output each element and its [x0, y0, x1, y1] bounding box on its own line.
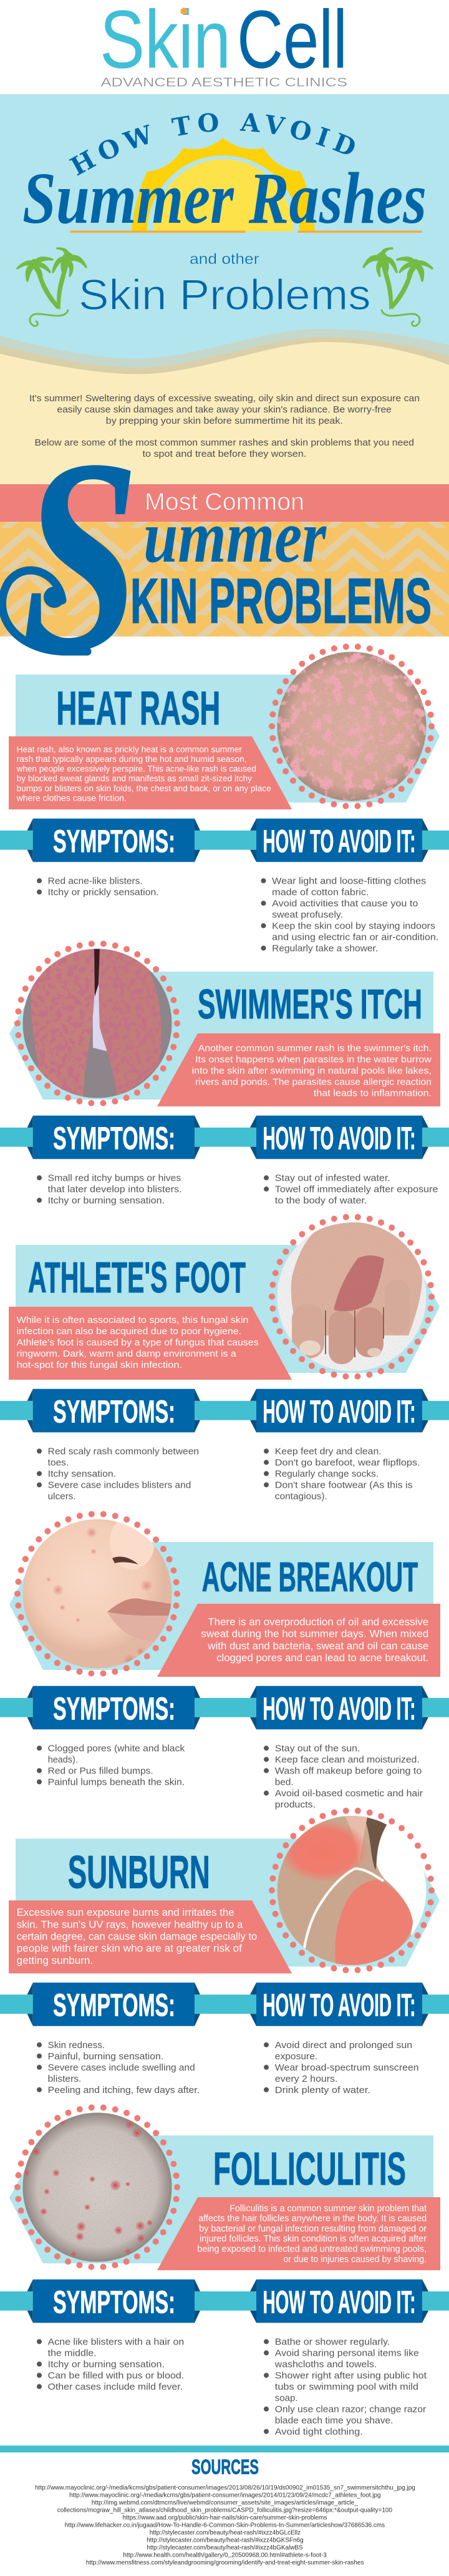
ribbon: symptoms and how to avoid it	[0, 1116, 449, 1159]
symptoms list: Itchy or burning sensation.	[48, 1195, 165, 1206]
ribbon: symptoms and how to avoid it: SYMPTOMS:	[53, 2284, 175, 2320]
intro text	[29, 394, 420, 459]
how to avoid list: Towel off immediately after exposure	[275, 1184, 438, 1194]
title: skin problems: Skin Problems	[79, 271, 371, 319]
ribbon: symptoms and how to avoid it	[0, 1686, 449, 1729]
section: folliculitis	[0, 2107, 449, 2437]
panel background	[9, 972, 433, 1100]
symptoms list: Other cases include mild fever.	[48, 2381, 183, 2392]
description: where clothes cause friction.	[16, 793, 127, 803]
sources list: http://stylecaster.com/beauty/heat-rash/#ixzz4bGLcEllz	[150, 2529, 301, 2536]
how to avoid list	[264, 2040, 419, 2095]
how to avoid list: Only use clean razor; change razor	[275, 2404, 426, 2414]
banner: most common summer skin problems: ummer	[143, 495, 327, 578]
section: heat rash	[0, 646, 449, 954]
symptoms list: Painful, burning sensation.	[48, 2051, 163, 2062]
intro text: It's summer! Sweltering days of excessive sweating, oily skin and direct sun exposure can	[29, 394, 420, 404]
description: ringworm. Dark, warm and damp environment is a	[17, 1349, 236, 1359]
hero sky background	[0, 94, 449, 375]
photo: athlete's foot	[277, 1222, 427, 1372]
section: acne breakout	[0, 1514, 449, 1810]
how to avoid list: Drink plenty of water.	[275, 2085, 370, 2095]
description: with dust and bacteria, sweat and oil can cause	[207, 1641, 428, 1652]
description: Excessive sun exposure burns and irritates the	[17, 1907, 234, 1918]
description: bumps or blisters on skin folds, the chest and back, or on any place	[17, 784, 271, 793]
how to avoid list	[264, 2336, 427, 2437]
how to avoid list: exposure.	[275, 2051, 317, 2062]
symptoms list: Itchy or burning sensation.	[48, 2359, 165, 2369]
section: athlete's foot	[0, 1217, 449, 1501]
description: infection can also be acquired due to poor hygiene.	[17, 1326, 241, 1337]
photo: swimmer's itch	[22, 947, 172, 1100]
how to avoid list: Stay out of infested water.	[275, 1173, 390, 1183]
dotted ring	[272, 1810, 432, 1970]
how to avoid list: Avoid activities that cause you to	[272, 898, 418, 909]
description: by bacterial or fungal infection resulting from damaged or	[199, 2224, 427, 2234]
description: when people excessively perspire. This acne-like rash is caused	[16, 764, 256, 774]
symptoms list	[37, 1446, 199, 1501]
sources list: http://stylecaster.com/beauty/heat-rash/#ixzz4bGKSFn6g	[147, 2536, 304, 2544]
section: swimmer's itch	[0, 944, 449, 1206]
banner: most common summer skin problems	[0, 402, 449, 710]
dotted ring	[272, 646, 432, 806]
footer divider band	[0, 2446, 449, 2452]
dotted ring	[17, 2107, 177, 2267]
description	[192, 1043, 432, 1098]
how to avoid list: soap.	[275, 2393, 298, 2403]
symptoms list: Severe case includes blisters and	[48, 1480, 191, 1490]
how to avoid list: Avoid oil-based cosmetic and hair	[275, 1788, 423, 1798]
how to avoid list: products.	[275, 1799, 316, 1810]
description: injured follicles. This skin condition is often acquired after	[200, 2234, 427, 2244]
description: into the skin after swimming in natural pools like lakes,	[192, 1065, 432, 1076]
ribbon: symptoms and how to avoid it: SYMPTOMS:	[53, 1690, 175, 1726]
symptoms list: toes.	[48, 1457, 69, 1468]
sources list: http://stylecaster.com/beauty/heat-rash/#ixzz4bGKalwBS	[147, 2544, 303, 2551]
icon: palm trees right	[364, 248, 432, 326]
description: There is an overproduction of oil and excessive	[208, 1616, 428, 1627]
symptoms list	[37, 1743, 185, 1787]
how to avoid list: Stay out of the sun.	[275, 1743, 360, 1754]
symptoms list: Red scaly rash commonly between	[48, 1446, 199, 1456]
how to avoid list: Keep feet dry and clean.	[275, 1446, 382, 1456]
description: Heat rash, also known as prickly heat is a common summer	[17, 744, 242, 754]
symptoms list: Red or Pus filled bumps.	[48, 1765, 153, 1776]
ribbon: symptoms and how to avoid it: SYMPTOMS:	[53, 1988, 175, 2023]
ribbon: symptoms and how to avoid it	[0, 2280, 449, 2323]
sun	[132, 138, 315, 232]
how to avoid list: Bathe or shower regularly.	[275, 2336, 390, 2347]
dotted ring	[272, 1217, 432, 1377]
logo: SkinCell	[100, 0, 347, 89]
how to avoid list: Regularly take a shower.	[272, 943, 378, 954]
description: being exposed to infected and untreated swimming pools,	[197, 2244, 427, 2254]
description: affects the hair follicles anywhere in the body. It is caused	[198, 2214, 427, 2224]
heading: HEAT RASH	[56, 682, 220, 735]
ribbon: symptoms and how to avoid it: SYMPTOMS:	[53, 823, 175, 859]
ribbon: symptoms and how to avoid it: SYMPTOMS:	[53, 1393, 175, 1429]
description: or due to injuries caused by shaving.	[283, 2255, 427, 2265]
how to avoid list: made of cotton fabric.	[272, 887, 369, 897]
description: Folliculitis is a common summer skin problem that	[229, 2203, 427, 2213]
how to avoid list: to the body of water.	[275, 1195, 367, 1206]
description: by blocked sweat glands and manifests as small zit-sized itchy	[17, 774, 252, 783]
how to avoid list: and using electric fan or air-condition.	[272, 932, 438, 942]
icon: palm trees left	[17, 248, 86, 326]
intro text: easily cause skin damages and take away your skin's radiance. Be worry-free	[57, 405, 392, 415]
description: that leads to inflammation.	[314, 1088, 432, 1098]
title: how to avoid (arched): HOW TO AVOID	[69, 113, 355, 176]
intro text: Below are some of the most common summer rashes and skin problems that you need	[35, 438, 414, 448]
sources list: http://www.lifehacker.co.in/jugaad/How-To-Handle-6-Common-Skin-Problems-In-Summer/articleshow/37686536.cms	[65, 2521, 385, 2529]
how to avoid list: contagious).	[275, 1491, 327, 1501]
photo: sunburn	[277, 1813, 427, 1969]
description panel	[9, 736, 292, 809]
symptoms list: Red acne-like blisters.	[48, 876, 143, 886]
photo: heat rash	[277, 651, 427, 801]
sources list	[35, 2484, 415, 2566]
symptoms list: heads).	[48, 1754, 78, 1765]
description	[201, 1616, 428, 1664]
how to avoid list: Wear light and loose-fitting clothes	[272, 876, 426, 886]
sources list: https://www.aad.org/public/skin-hair-nails/skin-care/summer-skin-problems	[122, 2514, 327, 2521]
heading: SUNBURN	[68, 1846, 210, 1898]
description	[16, 744, 271, 803]
intro text: to spot and treat before they worsen.	[142, 449, 306, 459]
banner: most common summer skin problems: S	[21, 402, 140, 710]
banner: most common summer skin problems: Most Common	[145, 489, 304, 515]
how to avoid list: tubs or swimming pool with mild	[275, 2381, 418, 2392]
description panel	[157, 2197, 440, 2270]
symptoms list: Skin redness.	[48, 2040, 105, 2051]
how to avoid list: every 2 hours.	[275, 2074, 337, 2084]
sources list: http://www.mensfitness.com/styleandgrooming/grooming/identify-and-treat-eight-summer-skin-rashes	[86, 2559, 364, 2566]
symptoms list: the middle.	[48, 2348, 97, 2358]
heading: ATHLETE'S FOOT	[28, 1253, 246, 1302]
how to avoid list	[261, 876, 438, 954]
logo: SkinCell: ADVANCED AESTHETIC CLINICS	[101, 76, 347, 89]
sand waves	[0, 329, 449, 487]
description: clogged pores and can lead to acne breakout.	[216, 1652, 428, 1664]
how to avoid list: Keep face clean and moisturized.	[275, 1754, 420, 1765]
description: sweat during the hot summer days. When mixed	[201, 1629, 428, 1640]
description	[17, 1907, 257, 1966]
dotted ring	[17, 944, 177, 1103]
description: certain degree, can cause skin damage especially to	[17, 1931, 257, 1942]
symptoms list	[37, 876, 159, 897]
description	[17, 1315, 259, 1370]
how to avoid list: Avoid tight clothing.	[275, 2426, 363, 2437]
sources heading: SOURCES	[191, 2455, 259, 2479]
symptoms list: Clogged pores (white and black	[48, 1743, 185, 1754]
sources list: http://www.mayoclinic.org/-/media/kcms/gbs/patient-consumer/images/2014/01/23/09/24/mcdc7_athletes_foot.jpg	[69, 2491, 381, 2499]
how to avoid list: Wash off makeup before going to	[275, 1765, 422, 1776]
sources list: collections/mcgraw_hill_skin_atlases/childhood_skin_problems/CASPD_folliculitis.jpg?resize=646px:*&output-quality=100	[57, 2506, 392, 2514]
symptoms list: Peeling and itching, few days after.	[48, 2085, 200, 2095]
dotted ring	[17, 1514, 177, 1674]
symptoms list	[37, 1173, 182, 1206]
how to avoid list: bed.	[275, 1777, 294, 1787]
symptoms list	[37, 2336, 184, 2392]
description: While it is often associated to sports, this fungal skin	[17, 1315, 248, 1325]
photo: folliculitis	[22, 2112, 172, 2262]
how to avoid list	[264, 1743, 423, 1810]
description: Its onset happens when parasites in the water burrow	[195, 1054, 432, 1065]
how to avoid list: Shower right after using public hot	[275, 2370, 427, 2381]
how to avoid list: Wear broad-spectrum sunscreen	[275, 2062, 419, 2073]
panel background	[16, 1838, 440, 1966]
symptoms list: ulcers.	[48, 1491, 76, 1501]
description	[197, 2203, 427, 2265]
description: people with fairer skin who are at greater risk of	[17, 1943, 242, 1954]
description: skin. The sun's UV rays, however healthy up to a	[17, 1919, 243, 1930]
ribbon: symptoms and how to avoid it	[0, 1389, 449, 1432]
description: rash that typically appears during the hot and humid season,	[17, 754, 247, 764]
symptoms list: Painful lumps beneath the skin.	[48, 1777, 185, 1787]
symptoms list: Small red itchy bumps or hives	[48, 1173, 181, 1183]
symptoms list: Can be filled with pus or blood.	[48, 2370, 184, 2381]
panel background	[9, 2135, 433, 2263]
how to avoid list: Regularly change socks.	[275, 1468, 379, 1479]
symptoms list: that later develop into blisters.	[48, 1184, 182, 1194]
symptoms list: Severe cases include swelling and	[48, 2062, 195, 2073]
how to avoid list: washcloths and towels.	[274, 2359, 377, 2369]
panel background	[16, 1245, 440, 1373]
section: sunburn	[0, 1810, 449, 2095]
symptoms list	[37, 2040, 200, 2095]
description panel	[157, 1604, 440, 1677]
orange horizon lines	[70, 231, 422, 233]
title: and other: and other	[190, 251, 259, 268]
sources list: http://www.mayoclinic.org/-/media/kcms/gbs/patient-consumer/images/2013/08/26/10/19/ds00902_im01535_sn7_swimmersitchthu_jpg.jpg	[35, 2484, 415, 2491]
description: getting sunburn.	[17, 1955, 93, 1966]
symptoms list: blisters.	[48, 2074, 81, 2084]
description: Athlete's foot is caused by a type of fungus that causes	[17, 1337, 259, 1348]
symptoms list: Acne like blisters with a hair on	[48, 2336, 184, 2347]
description: rivers and ponds. The parasites cause allergic reaction	[195, 1076, 432, 1087]
how to avoid list	[264, 1173, 438, 1206]
how to avoid list	[264, 1446, 420, 1501]
description panel	[9, 1307, 292, 1380]
photo: acne	[22, 1515, 175, 1670]
panel background	[9, 1542, 433, 1670]
description: Another common summer rash is the swimmer's itch.	[198, 1043, 432, 1053]
how to avoid list: Keep the skin cool by staying indoors	[272, 920, 435, 931]
description panel	[157, 1033, 440, 1106]
how to avoid list: sweat profusely.	[272, 909, 343, 920]
sources list: http://www.health.com/health/gallery/0,,20500968,00.html#athlete-s-foot-3	[123, 2551, 327, 2559]
sources list: http://img.webmd.com/dtmcms/live/webmd/consumer_assets/site_images/articles/image_article_	[92, 2499, 358, 2506]
symptoms list: Itchy or prickly sensation.	[48, 887, 159, 897]
how to avoid list: Don't share footwear (As this is	[275, 1480, 413, 1490]
how to avoid list: Avoid direct and prolonged sun	[275, 2040, 412, 2051]
panel background	[16, 675, 440, 803]
intro text: by prepping your skin before summertime hit its peak.	[106, 416, 343, 426]
how to avoid list: blade each time you shave.	[275, 2415, 393, 2426]
symptoms list: Itchy sensation.	[48, 1468, 116, 1479]
description: hot-spot for this fungal skin infection.	[17, 1360, 182, 1370]
ribbon: symptoms and how to avoid it	[0, 819, 449, 862]
ribbon: symptoms and how to avoid it	[0, 1983, 449, 2026]
how to avoid list: Don't go barefoot, wear flipflops.	[275, 1457, 420, 1468]
ribbon: symptoms and how to avoid it: SYMPTOMS:	[53, 1120, 175, 1156]
how to avoid list: Avoid sharing personal items like	[275, 2348, 419, 2358]
description panel	[9, 1900, 292, 1973]
